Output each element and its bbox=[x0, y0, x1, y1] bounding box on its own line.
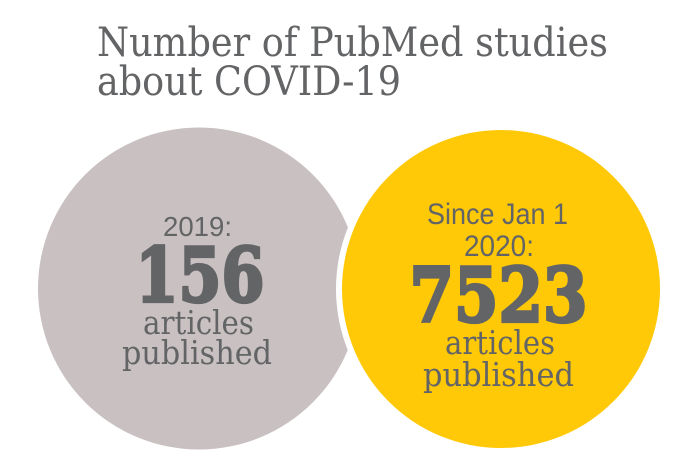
title bbox=[97, 20, 608, 105]
title: about COVID-19 bbox=[97, 59, 401, 105]
caption: articles published 2019: articles bbox=[143, 303, 254, 342]
label: since Jan 1 2020: 2020: bbox=[464, 230, 534, 263]
title: Number of PubMed studies bbox=[97, 20, 608, 66]
caption: articles published 2020 bbox=[423, 323, 574, 394]
panel: 2020 circle bbox=[342, 130, 660, 448]
label: 2019: 2019: bbox=[163, 211, 232, 242]
caption: articles published 2019: published bbox=[122, 333, 272, 372]
label: since Jan 1 2020: Since Jan 1 bbox=[427, 198, 568, 231]
label: since Jan 1 2020 bbox=[427, 198, 568, 263]
panel: 2019 circle bbox=[38, 124, 666, 454]
number: 7523: 7523 bbox=[410, 252, 588, 340]
caption: articles published 2019 bbox=[122, 303, 272, 372]
caption: articles published 2020: published bbox=[423, 355, 574, 394]
number: 156: 156 bbox=[136, 232, 264, 320]
caption: articles published 2020: articles bbox=[445, 323, 555, 362]
